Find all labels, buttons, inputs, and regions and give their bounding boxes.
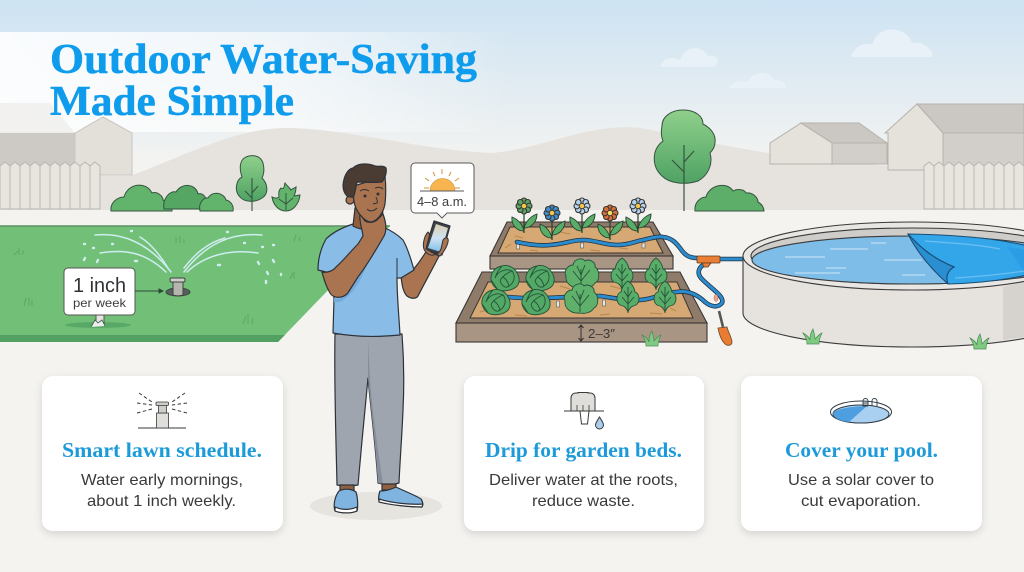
soil marks xyxy=(480,286,676,316)
pool wall xyxy=(743,257,1024,347)
right shoe xyxy=(379,487,423,507)
card: smart lawn schedule: about 1 inch weekly. xyxy=(87,493,236,510)
top garden bed xyxy=(490,198,673,269)
soil marks xyxy=(505,230,645,251)
soil depth marker: 2–3″ xyxy=(588,326,615,341)
trowel xyxy=(714,294,732,345)
card: drip for garden beds: Drip for garden beds. xyxy=(485,438,682,462)
shirt xyxy=(318,224,414,336)
lawn grass by beds and pool xyxy=(642,329,989,349)
bottom garden bed xyxy=(456,272,707,342)
head xyxy=(353,176,386,222)
sprinkler head xyxy=(166,278,190,296)
flowers xyxy=(512,198,651,240)
card: smart lawn schedule: Water early mornings, xyxy=(81,472,243,489)
card: drip for garden beds xyxy=(464,376,704,531)
ankles xyxy=(340,484,396,493)
left arm and hand xyxy=(322,214,386,297)
neck xyxy=(353,206,383,230)
pool xyxy=(743,222,1024,347)
pool water xyxy=(752,236,1024,284)
right arm xyxy=(401,250,439,298)
phone xyxy=(425,221,450,255)
card: cover your pool: Cover your pool. xyxy=(785,438,938,462)
vegetables xyxy=(482,258,676,315)
right tree xyxy=(654,110,715,211)
card: cover your pool: Use a solar cover to xyxy=(788,472,934,489)
pants xyxy=(335,334,404,486)
left tree xyxy=(236,156,267,211)
sprinkler spray xyxy=(84,231,281,283)
card: drip for garden beds: reduce waste. xyxy=(532,493,635,510)
callout sign: 1 inch per week: per week xyxy=(73,296,127,310)
tee connector xyxy=(697,256,720,267)
ear xyxy=(346,196,354,204)
soil depth marker xyxy=(578,325,615,341)
right bush xyxy=(695,185,764,211)
title: Outdoor Water-Saving xyxy=(50,37,477,83)
icon: drip emitter xyxy=(564,392,604,429)
right hand xyxy=(423,232,448,256)
grass tufts xyxy=(14,235,300,324)
drip hoses xyxy=(508,237,745,306)
card: cover your pool: cut evaporation. xyxy=(801,493,921,510)
icon: sunrise xyxy=(420,169,464,191)
title backdrop band xyxy=(0,32,512,132)
pool rim xyxy=(743,222,1024,290)
hills xyxy=(0,127,1024,210)
title: Made Simple xyxy=(50,79,294,125)
left fence xyxy=(0,162,100,209)
drip emitters xyxy=(516,243,645,307)
card: drip for garden beds: Deliver water at the roots, xyxy=(489,472,678,489)
solar cover xyxy=(908,234,1024,284)
right fence xyxy=(924,162,1024,209)
left shrub xyxy=(272,183,300,211)
callout sign: 1 inch per week: 1 inch xyxy=(73,275,126,297)
shirt shade xyxy=(334,262,368,302)
lawn xyxy=(0,226,390,342)
icon: sprinkler xyxy=(137,393,187,428)
arrow to sprinkler xyxy=(135,289,163,293)
left bushes xyxy=(111,185,233,211)
right houses xyxy=(770,104,1024,170)
callout sign: 1 inch per week xyxy=(64,268,135,328)
card: smart lawn schedule: Smart lawn schedule. xyxy=(62,438,262,462)
card: smart lawn schedule xyxy=(42,376,283,531)
shadow xyxy=(310,492,442,520)
time bubble: 4–8 a.m.: 4–8 a.m. xyxy=(417,194,467,209)
person xyxy=(310,164,450,520)
clouds xyxy=(660,29,932,88)
icon: pool xyxy=(830,399,892,423)
time bubble: 4–8 a.m. xyxy=(411,163,474,218)
left shoe xyxy=(334,489,358,513)
left house xyxy=(0,103,132,175)
hair xyxy=(343,164,386,197)
title xyxy=(50,37,477,125)
card: cover your pool xyxy=(741,376,982,531)
face details xyxy=(360,187,383,211)
